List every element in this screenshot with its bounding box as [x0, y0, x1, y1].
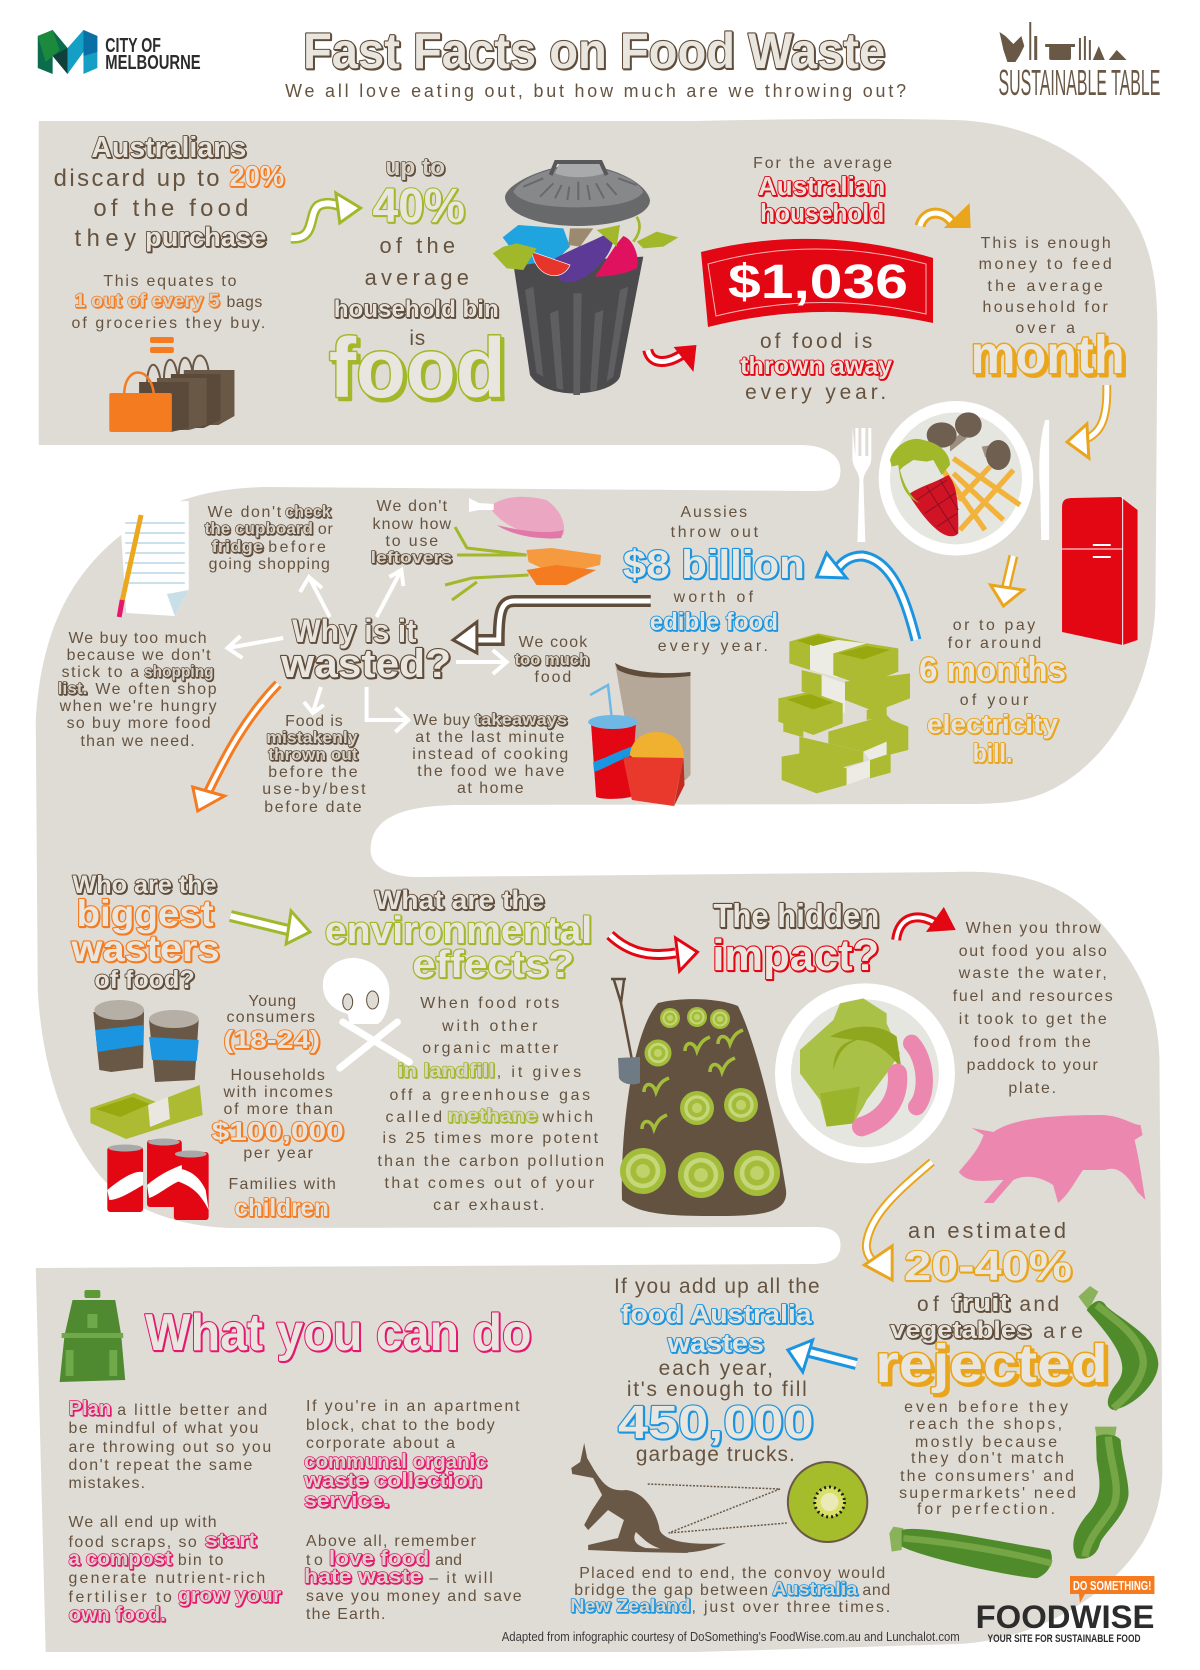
text block: takeaways: takeaways — [475, 710, 567, 729]
text block: takeaways — [412, 710, 568, 797]
arrow: orange down-left — [193, 684, 278, 811]
text block: food Australia wastes: If you add up all the — [614, 1275, 820, 1298]
text block: average Australian household: household — [760, 200, 884, 228]
icon: zucchinis — [889, 1286, 1158, 1578]
text block: Australians discard: Australians — [91, 132, 246, 164]
text block: food Australia wastes: wastes — [667, 1330, 764, 1358]
text block: 20-40% rejected: an estimated — [908, 1218, 1066, 1243]
heading: biggest wasters — [70, 871, 220, 994]
text block: of food thrown away: thrown away — [740, 352, 892, 380]
logo: Foodwise — [976, 1576, 1154, 1645]
text block: apartments and love food: save you money and save — [306, 1588, 522, 1605]
text block: up to 40%: of the — [380, 233, 455, 258]
text block: apartments and love food: to — [306, 1552, 323, 1569]
text block: cupboard: the cupboard — [205, 519, 313, 538]
text block: apartments and love food: If you're in an apartment — [306, 1398, 520, 1415]
text block: food Australia wastes: food Australia — [621, 1301, 812, 1329]
text block: buy too much: than we need. — [80, 733, 195, 750]
text block: Aussies throw out $8 billion: every year. — [658, 638, 768, 655]
icon: ham — [469, 497, 564, 539]
text block: mistakenly thrown out: Food is — [285, 713, 343, 730]
text block: takeaways: We buy — [413, 712, 470, 729]
text block: plan and compost: Plan — [69, 1398, 111, 1420]
heading: hidden impact — [712, 897, 879, 980]
text block: Australians discard: This equates to — [103, 273, 237, 290]
text block: Australians discard: purchase — [145, 222, 266, 252]
text block: waste water, fuel: it took to get the — [959, 1011, 1107, 1028]
text block: apartments and love food: and — [435, 1552, 462, 1569]
text block: plan and compost: a compost — [69, 1548, 172, 1570]
sub: steak — [910, 475, 958, 536]
text block: biggest wasters list: (18-24) — [224, 1026, 320, 1054]
text block: plan and compost: a little better and — [117, 1402, 267, 1419]
text block: cupboard: We don't — [208, 504, 282, 521]
text block: mistakenly thrown out: thrown out — [268, 745, 358, 764]
arrow: green — [230, 911, 310, 944]
text block: up to 40%: average — [365, 265, 469, 290]
text block: methane explanation: than the carbon pollution — [378, 1153, 604, 1170]
heading: environmental effects — [325, 885, 592, 986]
sub: bin body — [513, 257, 643, 393]
logo: Sustainable Table — [998, 22, 1160, 103]
text block: waste water, fuel: fuel and resources — [953, 988, 1113, 1005]
sub: shovel — [611, 979, 632, 1060]
text block: buy too much — [58, 630, 217, 750]
text block: leftovers — [371, 498, 452, 567]
text block: biggest wasters list: with incomes — [223, 1084, 333, 1101]
text block: average Australian household: For the average — [753, 155, 892, 172]
text block: methane explanation: is 25 times more potent — [382, 1130, 599, 1147]
text block: apartments and love food: communal organic — [304, 1451, 487, 1473]
text block: up to 40%: 40% — [373, 180, 465, 233]
text block: leftovers: to use — [385, 533, 438, 550]
text block: methane explanation — [378, 995, 604, 1214]
text block: methane explanation: organic matter — [422, 1040, 559, 1057]
text block: Aussies throw out $8 billion: $8 billion — [623, 543, 805, 587]
icon: pig — [959, 1115, 1146, 1203]
text block: methane explanation: called — [385, 1109, 442, 1126]
arrow: yellow down to electricity — [991, 556, 1023, 606]
icon: kangaroo — [571, 1443, 726, 1553]
icon: takeaway bag, drink and chips — [588, 663, 690, 807]
banner: $1,036 — [701, 239, 933, 327]
text block: plan and compost: food scraps, so — [69, 1534, 197, 1551]
text block: convoy bridge: bridge the gap between — [574, 1582, 768, 1599]
text block: electricity bill: electricity — [927, 711, 1059, 739]
logo: City of Melbourne: CITY OF — [105, 35, 161, 57]
text block: convoy bridge — [570, 1565, 890, 1616]
title: Fast Facts on Food Waste — [303, 23, 885, 79]
text block: plan and compost: start — [205, 1530, 257, 1552]
text block: plan and compost: own food. — [69, 1604, 166, 1626]
icon: cash block — [90, 1085, 203, 1139]
text block: up to 40%: up to — [385, 154, 445, 181]
text block: Australians discard: of groceries they buy. — [72, 315, 265, 332]
heading: biggest wasters: Who are the — [73, 871, 217, 899]
text block: buy too much: so buy more food — [67, 715, 211, 732]
text block: biggest wasters list: children — [234, 1194, 329, 1222]
sub: lettuce — [800, 998, 900, 1127]
heading: hidden impact: The hidden — [713, 897, 879, 934]
text block: waste water, fuel: waste the water, — [958, 965, 1107, 982]
credit line: Adapted from infographic courtesy of DoSomething's FoodWise.com.au and Lunchalot.com — [502, 1629, 960, 1644]
subtitle: We all love eating out, but how much are we throwing out? — [285, 81, 906, 101]
text block: apartments and love food: corporate about a — [306, 1435, 455, 1452]
icon: carrots — [445, 527, 601, 600]
text block: Australians discard: 1 out of every 5 — [75, 291, 220, 312]
text block: buy too much: list. — [58, 679, 87, 698]
icon: green compost bin — [60, 1290, 125, 1382]
icon: skull and crossbones — [323, 958, 409, 1068]
text block: cook too much: We cook — [519, 634, 587, 651]
text block: biggest wasters list — [212, 993, 344, 1222]
heading: why is it wasted: wasted? — [280, 642, 451, 686]
arrow: yellow down to plate — [1067, 385, 1107, 458]
heading: environmental effects: What are the — [375, 885, 544, 915]
text block: waste water, fuel: When you throw — [966, 920, 1101, 937]
text block: plan and compost: grow your — [178, 1585, 281, 1607]
text block: buy too much: We buy too much — [69, 630, 207, 647]
logo: Foodwise: YOUR SITE FOR SUSTAINABLE FOOD — [988, 1633, 1141, 1645]
arrow: brown to why wasted — [453, 601, 651, 653]
icon: plate with salad and sausages — [775, 983, 955, 1163]
icon: stacks of cash — [778, 633, 910, 793]
text block: Australians discard: discard up to — [54, 165, 220, 192]
arrow: blue left — [788, 1340, 856, 1372]
text block: Australians discard: of the food — [93, 195, 248, 222]
text block: electricity bill: for around — [948, 635, 1041, 652]
arrow: red curved — [896, 907, 956, 940]
text block: 20-40% rejected: rejected — [875, 1334, 1108, 1394]
text block: Australians discard: they — [75, 225, 136, 252]
text block: average Australian household — [753, 155, 892, 228]
text block: electricity bill: or to pay — [953, 617, 1035, 634]
text block: methane explanation: with other — [441, 1018, 538, 1035]
text block: 20-40% rejected: they don't match — [911, 1450, 1064, 1467]
text block: plan and compost: be mindful of what you — [69, 1420, 258, 1437]
text block: plan and compost: fertiliser to — [69, 1589, 172, 1606]
text block: cupboard: fridge — [212, 537, 263, 556]
text block: methane explanation: which — [541, 1109, 593, 1126]
icon: kiwi fruit — [787, 1461, 868, 1543]
text block: methane explanation: methane — [447, 1106, 537, 1127]
text block: waste water, fuel: out food you also — [959, 943, 1107, 960]
arrow: red — [648, 345, 696, 372]
text block: cupboard — [205, 502, 334, 573]
text block: buy too much: We often shop — [95, 681, 217, 698]
heading: why is it wasted — [280, 613, 451, 686]
text block: 20-40% rejected: even before they — [904, 1399, 1068, 1416]
text block: 20-40% rejected: mostly because — [915, 1434, 1057, 1451]
text block: apartments and love food: hate waste — [304, 1566, 422, 1588]
text block: feed household for a month: This is enough — [981, 235, 1111, 252]
text block: of food thrown away: every year. — [745, 381, 886, 404]
text block: buy too much: stick to a — [62, 664, 139, 681]
text block: apartments and love food: love food — [329, 1548, 429, 1570]
text block: 20-40% rejected: and — [1019, 1293, 1059, 1316]
text block: leftovers: We don't — [377, 498, 448, 515]
text block: plan and compost: mistakes. — [69, 1475, 145, 1492]
text block: convoy bridge: Placed end to end, the convoy would — [579, 1565, 885, 1582]
logo: Foodwise: FOODWISE — [976, 1599, 1154, 1635]
text block: leftovers: leftovers — [371, 548, 452, 567]
text block: feed household for a month — [971, 235, 1125, 385]
text block: of food thrown away — [740, 330, 892, 404]
heading: why is it wasted: Why is it — [292, 613, 417, 649]
sub: sausages — [862, 1073, 898, 1127]
text block: food Australia wastes: it's enough to fill — [627, 1378, 807, 1401]
text block: up to 40% — [329, 154, 506, 415]
sub: mushrooms — [950, 433, 967, 452]
icon: fork — [852, 428, 871, 542]
text block: up to 40%: food — [329, 321, 506, 415]
text block: electricity bill: 6 months — [919, 651, 1066, 689]
logo: City of Melbourne: MELBOURNE — [105, 52, 201, 74]
text block: mistakenly thrown out: before date — [264, 799, 362, 816]
sub: lettuce — [890, 439, 950, 503]
text block: convoy bridge: and — [862, 1582, 890, 1599]
heading: environmental effects: effects? — [412, 944, 574, 986]
text block: food Australia wastes: each year, — [659, 1357, 773, 1380]
text block: convoy bridge: , just over three times. — [691, 1599, 890, 1616]
heading: what you can do: What you can do — [145, 1303, 532, 1361]
text block: takeaways: the food we have — [417, 763, 564, 780]
heading: biggest wasters: wasters — [70, 928, 220, 969]
text block: cupboard: or — [318, 521, 334, 538]
text block: buy too much: when we're hungry — [59, 698, 217, 715]
text block: biggest wasters list: per year — [243, 1145, 314, 1162]
text block: Aussies throw out $8 billion: Aussies — [681, 504, 747, 521]
text block: biggest wasters list: Young — [248, 993, 296, 1010]
text block: buy too much: shopping — [144, 662, 214, 681]
text block: apartments and love food — [303, 1398, 522, 1623]
text block: electricity bill: of your — [960, 692, 1029, 709]
heading: hidden impact: impact? — [712, 931, 879, 980]
text block: apartments and love food: – it will — [429, 1570, 493, 1587]
text block: plan and compost: We all end up with — [69, 1514, 217, 1531]
text block: 20-40% rejected: 20-40% — [904, 1242, 1072, 1289]
text block: cupboard: check — [285, 502, 331, 521]
text block: apartments and love food: the Earth. — [306, 1606, 385, 1623]
text block: apartments and love food: block, chat to the body — [306, 1417, 495, 1434]
text block: plan and compost: are throwing out so you — [69, 1439, 271, 1456]
logo: City of Melbourne — [38, 30, 201, 74]
heading: biggest wasters: biggest — [76, 893, 214, 934]
text block: biggest wasters list: Families with — [229, 1176, 336, 1193]
arrows: white reasons — [228, 570, 507, 732]
text block: plan and compost — [69, 1398, 281, 1626]
icon: vegetable garden and shovel — [611, 979, 786, 1216]
text block: Aussies throw out $8 billion: throw out — [671, 524, 759, 541]
text block: up to 40%: is — [409, 327, 425, 350]
text block: 20-40% rejected: the consumers' and — [900, 1468, 1074, 1485]
text block: average Australian household: Australian — [758, 173, 885, 201]
text block: biggest wasters list: consumers — [227, 1009, 315, 1026]
arrow: blue curved — [817, 553, 916, 640]
text block: waste water, fuel: food from the — [974, 1034, 1091, 1051]
arrow: red wave — [610, 935, 697, 971]
text block: takeaways: at the last minute — [415, 729, 564, 746]
text block: feed household for a month: month — [971, 325, 1125, 385]
text block: 20-40% rejected: reach the shops, — [909, 1416, 1062, 1433]
text block: feed household for a month: the average — [988, 278, 1103, 295]
text block: Aussies throw out $8 billion: worth of — [673, 589, 754, 606]
arrow: green squiggle — [291, 193, 361, 238]
text block: methane explanation: that comes out of your — [384, 1175, 595, 1192]
text block: biggest wasters list: $100,000 — [212, 1118, 344, 1146]
text block: waste water, fuel: paddock to your — [967, 1057, 1099, 1074]
text block: electricity bill: bill. — [973, 740, 1012, 768]
text block: waste water, fuel: plate. — [1008, 1080, 1056, 1097]
icon: fridge — [1062, 497, 1138, 645]
sub: sprouts — [685, 1037, 710, 1051]
icon: plate with steak, chips and mushrooms — [879, 401, 1033, 556]
heading: environmental effects: environmental — [325, 910, 592, 952]
text block: 20-40% rejected: of — [917, 1293, 939, 1316]
text block: food Australia wastes — [614, 1275, 820, 1466]
text block: mistakenly thrown out: use-by/best — [262, 781, 366, 798]
text block: 20-40% rejected — [875, 1218, 1108, 1518]
text block: food Australia wastes: garbage trucks. — [636, 1443, 795, 1466]
text block: convoy bridge: Australia — [772, 1579, 859, 1599]
text block: feed household for a month: over a — [1015, 320, 1075, 337]
text block: apartments and love food: waste collection — [303, 1470, 482, 1492]
text block: Aussies throw out $8 billion: edible food — [650, 608, 778, 636]
text block: convoy bridge: New Zealand — [570, 1596, 690, 1616]
text block: up to 40%: household bin — [334, 296, 499, 323]
text block: plan and compost: generate nutrient-rich — [69, 1570, 265, 1587]
text block: takeaways: at home — [457, 780, 524, 797]
text block: feed household for a month: money to feed — [979, 256, 1112, 273]
text block: apartments and love food: Above all, remember — [306, 1533, 477, 1550]
text block: 20-40% rejected: supermarkets' need — [899, 1485, 1076, 1502]
text block: Aussies throw out $8 billion — [623, 504, 805, 655]
icon: rubbish bin full of food — [493, 162, 678, 395]
arrow: yellow curved down — [864, 1162, 932, 1280]
text block: takeaways: instead of cooking — [412, 746, 568, 763]
text block: buy too much: because we don't — [67, 647, 211, 664]
text block: biggest wasters list: of more than — [224, 1101, 333, 1118]
icon: dotted scale lines — [648, 1484, 787, 1533]
text block: methane explanation: car exhaust. — [433, 1197, 544, 1214]
logo: Foodwise: DO SOMETHING! — [1073, 1578, 1151, 1593]
icon: coffee cups — [93, 1000, 199, 1082]
text block: mistakenly thrown out — [262, 713, 366, 816]
text block: methane explanation: off a greenhouse gas — [389, 1087, 590, 1104]
text block: cook too much — [515, 634, 589, 686]
text block: leftovers: know how — [373, 516, 452, 533]
heading: biggest wasters: of food? — [94, 966, 195, 994]
text block: methane explanation: in landfill — [397, 1061, 495, 1082]
text block: cupboard: before — [268, 539, 326, 556]
text block: mistakenly thrown out: mistakenly — [266, 728, 358, 747]
text block: Australians discard: bags — [227, 294, 262, 311]
banner: $1,036: $1,036 — [728, 256, 908, 309]
text block: waste water, fuel — [953, 920, 1113, 1097]
icon: knife — [1039, 420, 1049, 540]
text block: 20-40% rejected: vegetables — [890, 1317, 1031, 1344]
text block: feed household for a month: household for — [983, 299, 1108, 316]
sub: chips — [942, 458, 1020, 530]
sub: lid — [505, 165, 650, 226]
text block: cook too much: food — [535, 669, 571, 686]
text block: electricity bill — [919, 617, 1066, 768]
text block: mistakenly thrown out: before the — [268, 764, 358, 781]
text block: 20-40% rejected: fruit — [952, 1290, 1009, 1317]
text block: 20-40% rejected: are — [1043, 1320, 1083, 1343]
text block: methane explanation: , it gives — [497, 1064, 581, 1081]
icon: soft drink cans — [107, 1138, 209, 1220]
text block: food Australia wastes: 450,000 — [618, 1396, 814, 1448]
text block: of food thrown away: of food is — [760, 330, 872, 353]
icon: notepad and pencil — [119, 501, 189, 617]
icon: shopping bags — [109, 337, 234, 432]
sub: lettuces — [660, 1008, 680, 1028]
text block: apartments and love food: service. — [304, 1490, 389, 1512]
text block: methane explanation: When food rots — [420, 995, 559, 1012]
text block: 20-40% rejected: for perfection. — [917, 1501, 1055, 1518]
text block: plan and compost: don't repeat the same — [69, 1457, 252, 1474]
arrow: yellow curved — [920, 203, 971, 228]
sub: food spilling out — [503, 225, 570, 265]
text block: Australians discard: 20% — [229, 161, 284, 193]
text block: cupboard: going shopping — [209, 556, 330, 573]
text block: cook too much: too much — [515, 650, 589, 669]
text block: plan and compost: bin to — [178, 1552, 224, 1569]
text block: biggest wasters list: Households — [230, 1067, 325, 1084]
text block: Australians discard — [54, 132, 284, 332]
